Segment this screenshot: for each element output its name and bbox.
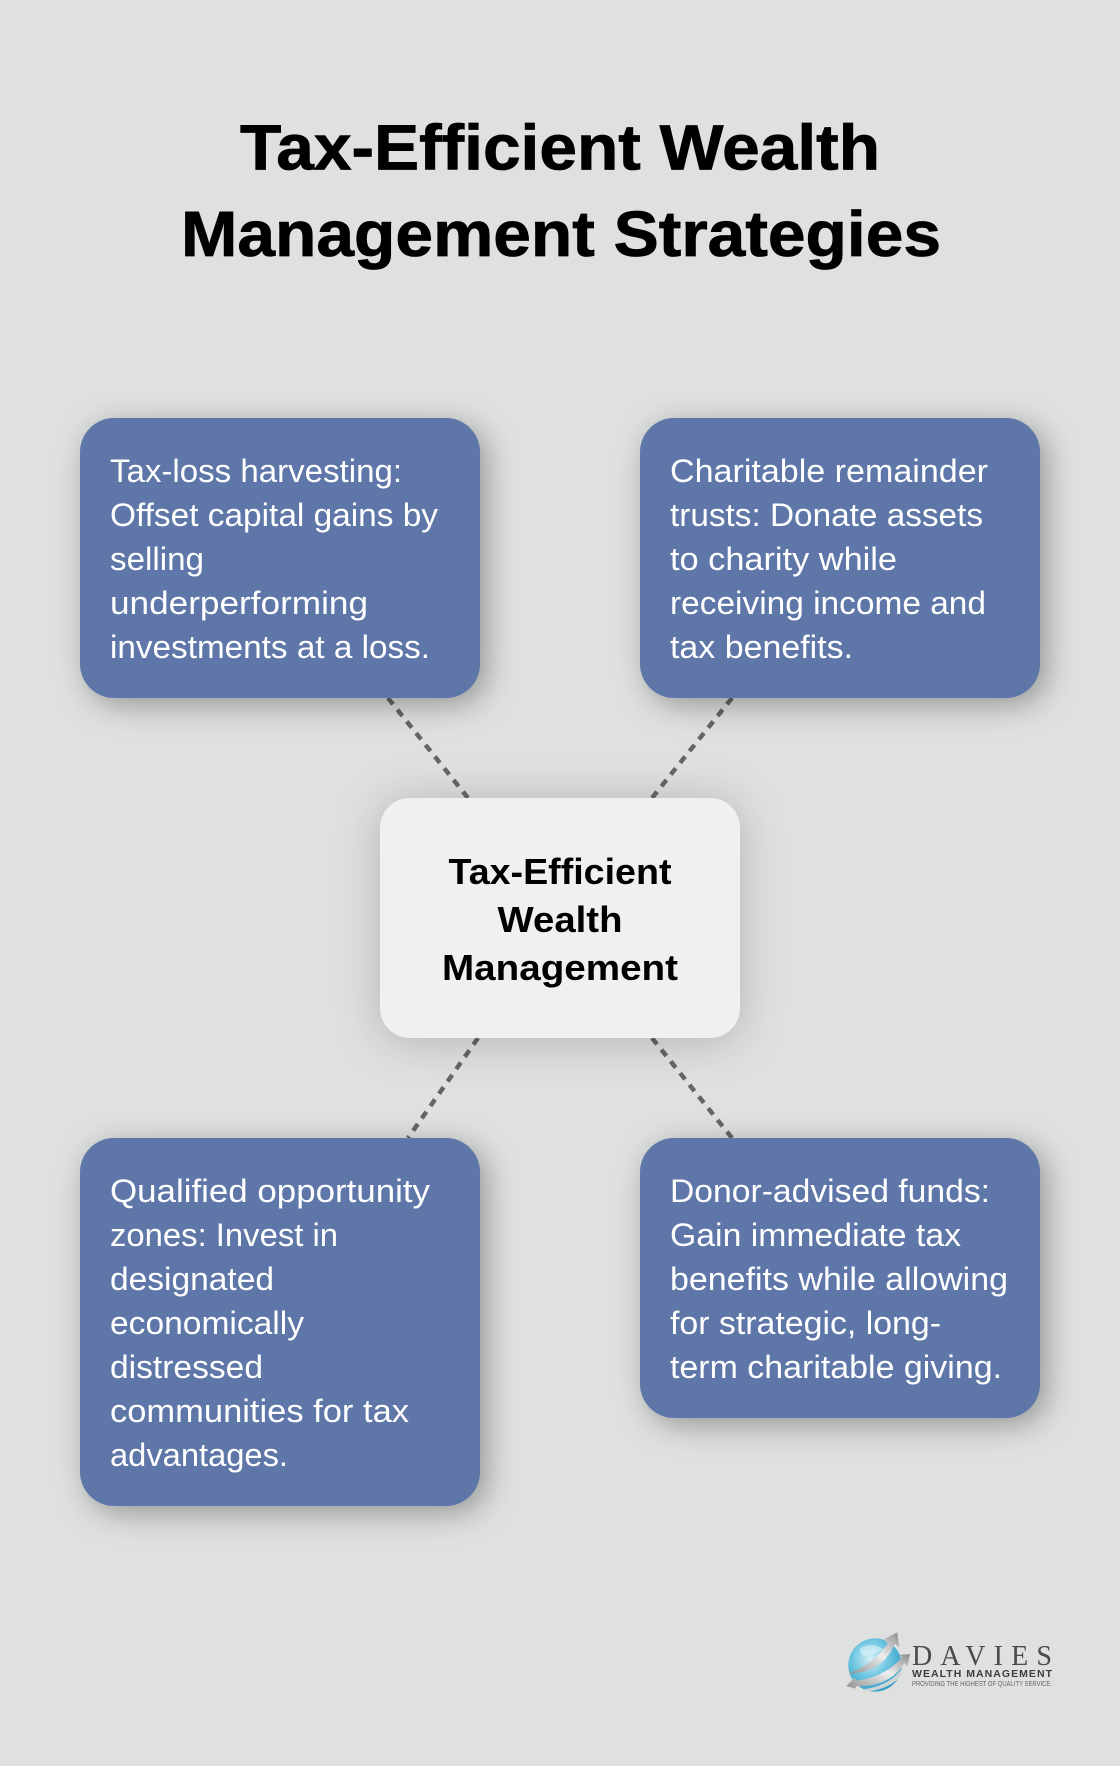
panel: donor-advised funds	[640, 1138, 1040, 1418]
panel: qualified opportunity zones: distressed	[110, 1349, 263, 1385]
panel: charitable remainder trusts: receiving income and	[670, 585, 986, 621]
panel: qualified opportunity zones: advantages.	[110, 1437, 288, 1473]
icon: globe with arrows	[846, 1632, 910, 1692]
panel: qualified opportunity zones: zones: Invest in	[110, 1217, 338, 1253]
panel: tax-loss harvesting: Offset capital gains by	[110, 497, 438, 533]
logo tagline: PROVIDING THE HIGHEST OF QUALITY SERVICE.	[912, 1681, 1052, 1688]
panel: donor-advised funds: Gain immediate tax	[670, 1217, 961, 1253]
title: Tax-Efficient Wealth	[240, 112, 880, 184]
dashed connectors	[388, 698, 732, 1138]
panel: tax-loss harvesting	[80, 418, 480, 698]
title: Management Strategies	[181, 198, 941, 270]
title	[181, 112, 941, 270]
logo wordmark: DAVIES	[912, 1641, 1052, 1672]
panel: central topic: Management	[442, 947, 678, 988]
panel: charitable remainder trusts: trusts: Donate assets	[670, 497, 983, 533]
panel: donor-advised funds: for strategic, long-	[670, 1305, 941, 1341]
panel: tax-loss harvesting: selling	[110, 541, 204, 577]
logo subtitle: WEALTH MANAGEMENT	[912, 1668, 1053, 1680]
panel: qualified opportunity zones: designated	[110, 1261, 274, 1297]
panel: donor-advised funds: benefits while allowing	[670, 1261, 1008, 1297]
panel: tax-loss harvesting: underperforming	[110, 585, 368, 621]
panel: qualified opportunity zones: communities for tax	[110, 1393, 409, 1429]
panel: charitable remainder trusts: tax benefits.	[670, 629, 853, 665]
panel: qualified opportunity zones: Qualified opportunity	[110, 1173, 430, 1209]
panel: central topic	[380, 798, 740, 1038]
panel: donor-advised funds: Donor-advised funds:	[670, 1173, 990, 1209]
panel: central topic: Wealth	[498, 899, 622, 940]
panel: charitable remainder trusts: Charitable remainder	[670, 453, 988, 489]
panel: donor-advised funds: term charitable giving.	[670, 1349, 1002, 1385]
panel: charitable remainder trusts: to charity while	[670, 541, 897, 577]
panel: tax-loss harvesting: Tax-loss harvesting:	[110, 453, 402, 489]
logo: Davies Wealth Management	[846, 1632, 1053, 1692]
panel: qualified opportunity zones: economically	[110, 1305, 304, 1341]
panel: central topic: Tax-Efficient	[448, 851, 672, 892]
panel: tax-loss harvesting: investments at a loss.	[110, 629, 430, 665]
panel: qualified opportunity zones	[80, 1138, 480, 1506]
panel: charitable remainder trusts	[640, 418, 1040, 698]
